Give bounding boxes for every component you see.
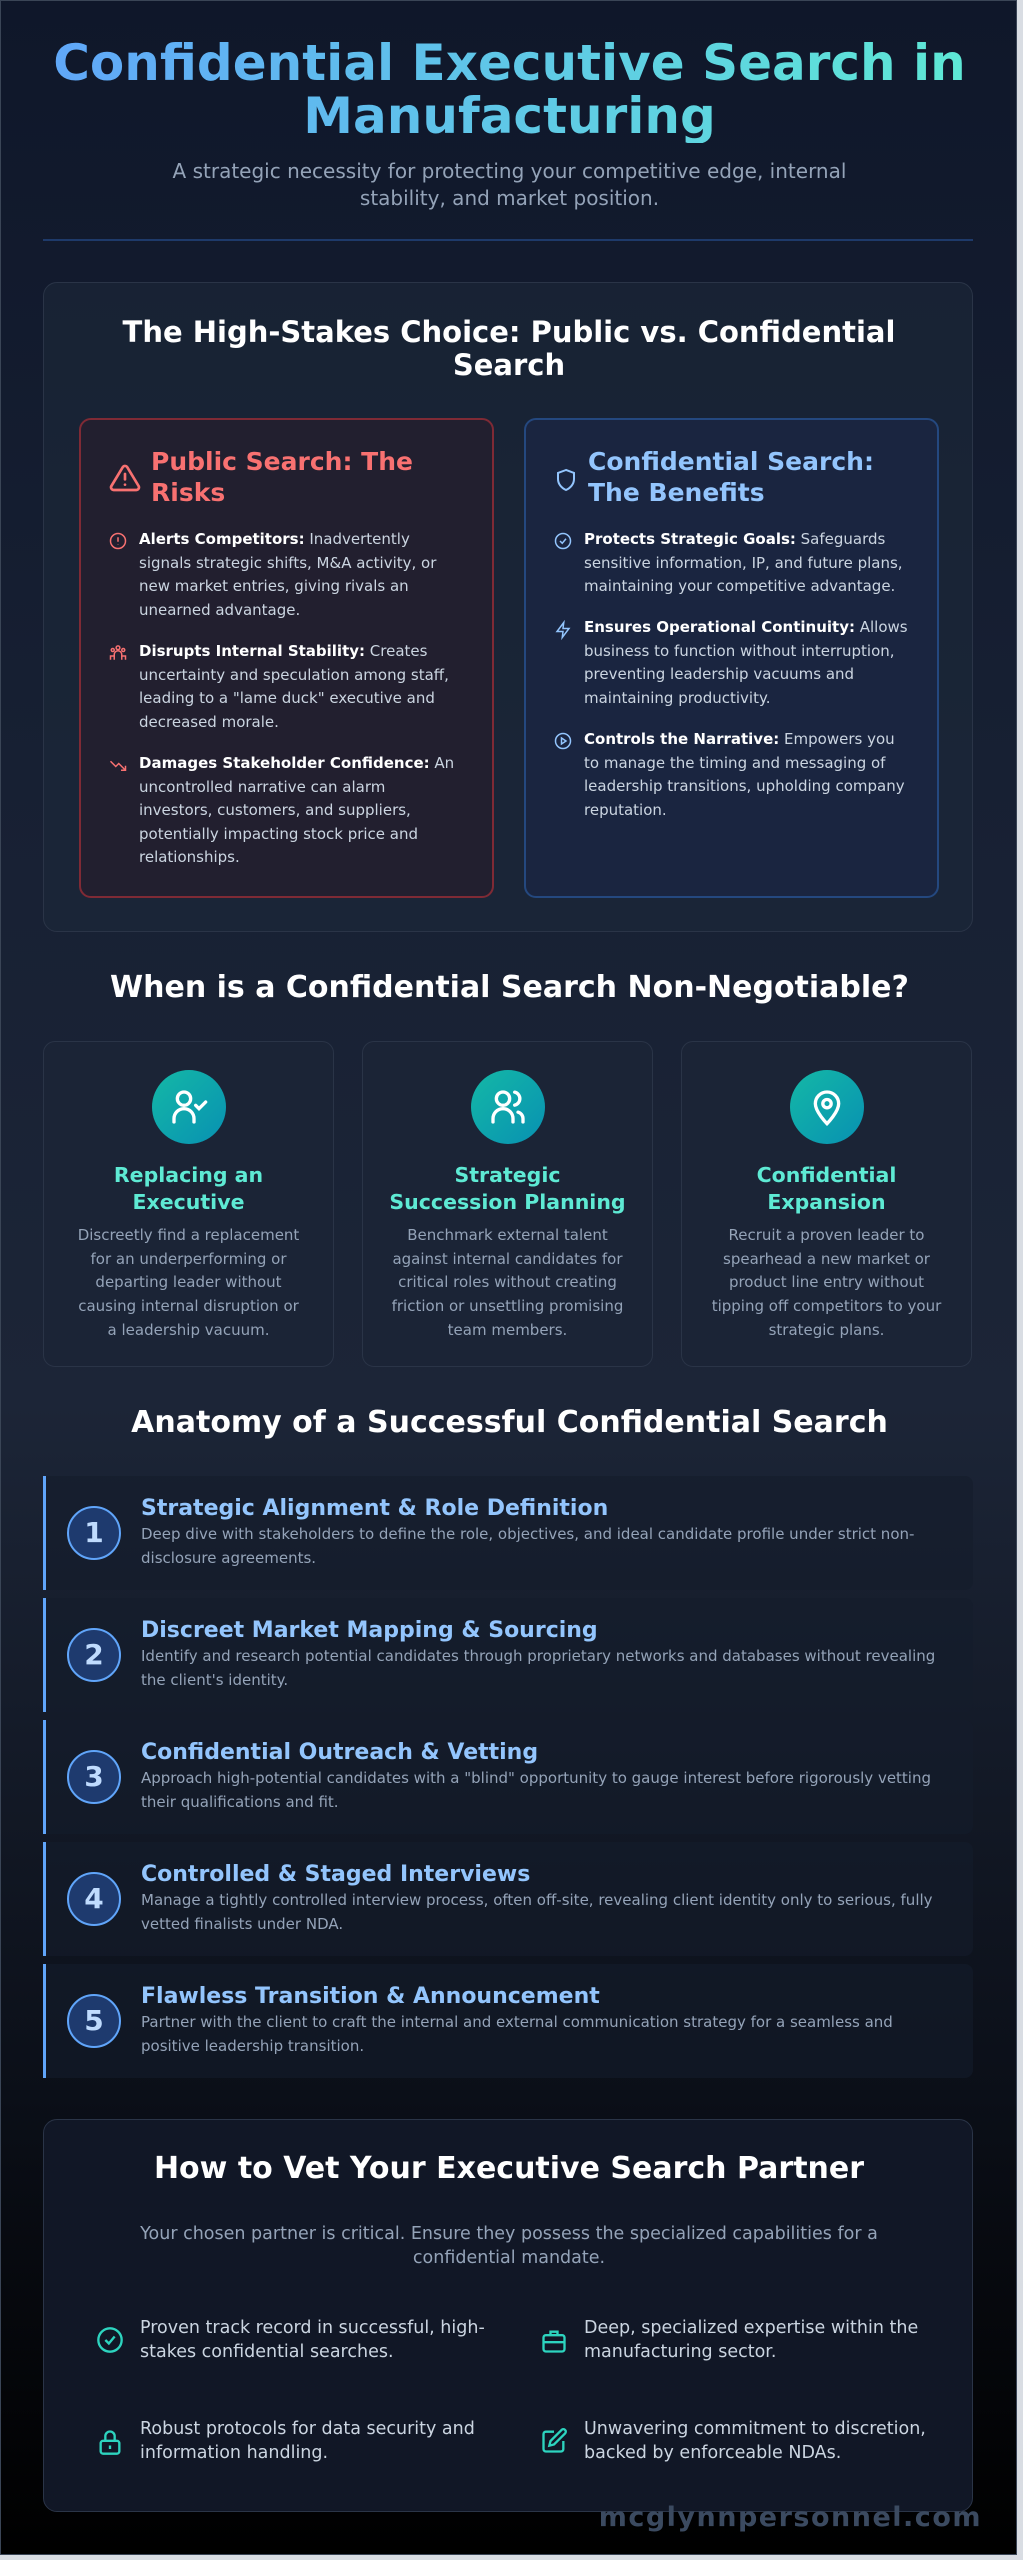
step 1: Strategic Alignment & Role Definition	[141, 1496, 608, 1521]
benefit: continuity: Ensures Operational Continuity: Allows business to function without interruption, preventing leadership vacuums and maintaining productivity.	[584, 618, 908, 706]
watermark: mcglynnpersonnel.com	[599, 2502, 982, 2533]
criterion: data security: Robust protocols for data security and information handling.	[140, 2419, 475, 2463]
panel heading: How to Vet Your Executive Search Partner	[154, 2151, 864, 2186]
intro text: Your chosen partner is critical. Ensure they possess the specialized capabilities for a confidential mandate.	[140, 2224, 878, 2268]
step 3	[43, 1720, 973, 1834]
scenario card: succession: Succession Planning	[389, 1190, 626, 1214]
step 4	[43, 1842, 973, 1956]
step 1: Deep dive with stakeholders to define the role, objectives, and ideal candidate profile under strict non-disclosure agreements.	[141, 1525, 914, 1567]
icon: shield	[557, 468, 575, 492]
subtitle: A strategic necessity for protecting your competitive edge, internal stability, and market position.	[173, 159, 846, 210]
icon: users	[471, 1070, 545, 1144]
scenario card: expansion: Expansion	[767, 1190, 886, 1214]
step 2: 2	[84, 1638, 104, 1671]
scenario card: replacing: Executive	[132, 1190, 244, 1214]
step 2	[43, 1598, 973, 1712]
step 2: Discreet Market Mapping & Sourcing	[141, 1618, 598, 1643]
scenario card: succession	[362, 1041, 653, 1367]
risk: stakeholder confidence: Damages Stakeholder Confidence: An uncontrolled narrative can alarm investors, customers, and suppliers, potentially impacting stock price and relationships.	[139, 754, 454, 866]
step 5: Flawless Transition & Announcement	[141, 1984, 600, 2009]
scenario card: succession: Strategic	[454, 1163, 561, 1187]
icon: map pin	[790, 1070, 864, 1144]
scenario card: expansion: Confidential	[757, 1163, 896, 1187]
step 1	[43, 1476, 973, 1590]
card: confidential search benefits	[524, 418, 939, 898]
panel: vet partner	[43, 2119, 973, 2512]
scenario card: replacing: Discreetly find a replacement for an underperforming or departing leader without causing internal disruption or a leadership vacuum.	[78, 1226, 299, 1339]
step 5: Partner with the client to craft the internal and external communication strategy for a seamless and positive leadership transition.	[141, 2013, 893, 2055]
icon: warning	[110, 464, 140, 492]
card: public search risks	[79, 418, 494, 898]
card heading: Confidential Search: The Benefits	[588, 447, 874, 507]
scenario card: succession: Benchmark external talent against internal candidates for critical roles without creating friction or unsettling promising team members.	[392, 1226, 623, 1339]
step 5	[43, 1964, 973, 2078]
card heading: Public Search: The Risks	[151, 447, 413, 507]
step 3: Approach high-potential candidates with a "blind" opportunity to gauge interest before rigorously vetting their qualifications and fit.	[141, 1769, 931, 1811]
benefit: protects goals: Protects Strategic Goals: Safeguards sensitive information, IP, and future plans, maintaining your competitive advantage.	[584, 530, 903, 595]
icon: user check	[152, 1070, 226, 1144]
step 4: Manage a tightly controlled interview process, often off-site, revealing client identity only to serious, fully vetted finalists under NDA.	[141, 1891, 933, 1933]
panel: public vs confidential	[43, 282, 973, 932]
criterion: discretion: Unwavering commitment to discretion, backed by enforceable NDAs.	[584, 2419, 926, 2463]
risk: alerts competitors: Alerts Competitors: Inadvertently signals strategic shifts, M&A activity, or new market entries, giving rivals an unearned advantage.	[139, 530, 436, 618]
scenario card: replacing	[43, 1041, 334, 1367]
panel heading: The High-Stakes Choice: Public vs. Confidential Search	[123, 315, 895, 382]
heading: anatomy: Anatomy of a Successful Confidential Search	[131, 1405, 888, 1440]
benefit: narrative: Controls the Narrative: Empowers you to manage the timing and messaging of leadership transitions, upholding company reputation.	[584, 730, 905, 818]
step 4: 4	[84, 1882, 104, 1915]
step 3: Confidential Outreach & Vetting	[141, 1740, 538, 1765]
risk: disrupts stability: Disrupts Internal Stability: Creates uncertainty and speculation among staff, leading to a "lame duck" executive and decreased morale.	[139, 642, 449, 730]
scenario card: replacing: Replacing an	[114, 1163, 263, 1187]
scenario card: expansion: Recruit a proven leader to spearhead a new market or product line entry without tipping off competitors to your strategic plans.	[712, 1226, 941, 1339]
heading: non-negotiable: When is a Confidential Search Non-Negotiable?	[110, 970, 909, 1005]
criterion: expertise: Deep, specialized expertise within the manufacturing sector.	[584, 2318, 918, 2362]
step 5: 5	[84, 2004, 104, 2037]
step 4: Controlled & Staged Interviews	[141, 1862, 530, 1887]
scenario card: expansion	[681, 1041, 972, 1367]
step 2: Identify and research potential candidates through proprietary networks and databases without revealing the client's identity.	[141, 1647, 935, 1689]
criterion: track record: Proven track record in successful, high-stakes confidential searches.	[140, 2318, 485, 2362]
step 3: 3	[84, 1760, 104, 1793]
step 1: 1	[84, 1516, 104, 1549]
title: Confidential Executive Search in Manufacturing	[53, 34, 966, 145]
